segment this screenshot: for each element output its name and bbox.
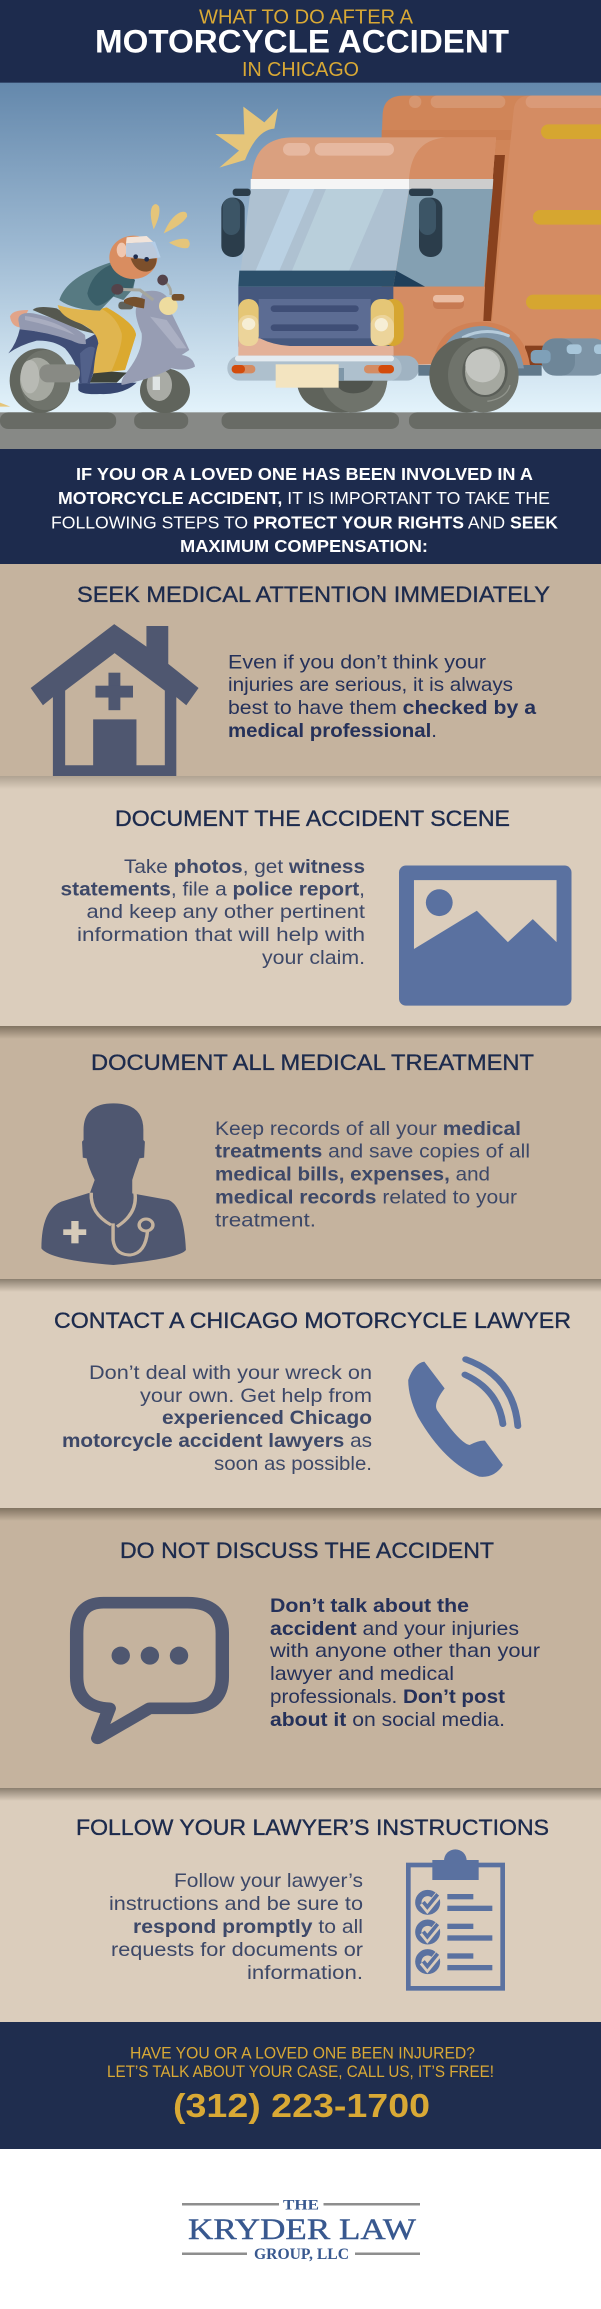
body text: Follow your lawyer’s bbox=[174, 1870, 363, 1892]
heading: seek medical attention: SEEK MEDICAL ATTENTION IMMEDIATELY bbox=[77, 582, 550, 607]
title line: what to do after a: WHAT TO DO AFTER A bbox=[199, 6, 413, 28]
heading: document the accident scene: DOCUMENT THE ACCIDENT SCENE bbox=[115, 806, 510, 831]
backdrop: sky and road bbox=[0, 83, 601, 449]
cta question: HAVE YOU OR A LOVED ONE BEEN INJURED? bbox=[130, 2044, 475, 2062]
panel: seek medical attention bbox=[0, 564, 601, 778]
body text: Don’t deal with your wreck on bbox=[89, 1362, 372, 1384]
intro text: MAXIMUM COMPENSATION: bbox=[180, 536, 428, 556]
panel: do not discuss the accident bbox=[0, 1508, 601, 1788]
title line: in chicago: IN CHICAGO bbox=[242, 58, 359, 81]
body text bbox=[60, 856, 366, 969]
hero illustration: motorcycle and truck bbox=[0, 83, 601, 449]
title line: motorcycle accident: MOTORCYCLE ACCIDENT bbox=[95, 24, 509, 60]
body text: your claim. bbox=[262, 947, 365, 969]
body text: best to have them checked by a bbox=[228, 697, 536, 719]
truck cargo box bbox=[382, 96, 601, 357]
body text: and keep any other pertinent bbox=[86, 901, 366, 923]
truck bumper bbox=[227, 356, 419, 388]
scooter body bbox=[8, 275, 195, 413]
panel: contact a chicago motorcycle lawyer bbox=[0, 1279, 601, 1508]
intro text: FOLLOWING STEPS TO PROTECT YOUR RIGHTS AND SEEK bbox=[51, 512, 558, 532]
body text: with anyone other than your bbox=[269, 1640, 541, 1662]
heading: do not discuss the accident: DO NOT DISCUSS THE ACCIDENT bbox=[120, 1538, 494, 1563]
truck bbox=[215, 96, 601, 412]
scooter and rider bbox=[8, 236, 195, 413]
panel: follow your lawyer's instructions bbox=[0, 1788, 601, 2022]
body text: experienced Chicago bbox=[162, 1407, 372, 1429]
intro text: IF YOU OR A LOVED ONE HAS BEEN INVOLVED IN A bbox=[76, 464, 533, 484]
body text: treatments and save copies of all bbox=[215, 1141, 530, 1163]
body text bbox=[269, 1595, 541, 1731]
impact burst bbox=[215, 107, 278, 168]
icon: photo bbox=[399, 866, 572, 1006]
header band bbox=[0, 0, 601, 83]
body text bbox=[228, 652, 536, 742]
truck rear wheel and exhaust bbox=[418, 322, 601, 412]
truck headlights bbox=[238, 299, 404, 346]
body text: about it on social media. bbox=[270, 1709, 505, 1731]
icon: medical house bbox=[31, 624, 199, 778]
intro band bbox=[0, 449, 601, 564]
body text: motorcycle accident lawyers as bbox=[62, 1430, 372, 1452]
logo: the kryder law group: GROUP, LLC bbox=[254, 2246, 349, 2263]
body text: accident and your injuries bbox=[270, 1618, 519, 1640]
body text: medical records related to your bbox=[215, 1186, 518, 1208]
heading: document all medical treatment: DOCUMENT ALL MEDICAL TREATMENT bbox=[91, 1050, 534, 1075]
logo: the kryder law group: THE bbox=[283, 2198, 319, 2214]
body text bbox=[109, 1870, 364, 1984]
body text: requests for documents or bbox=[111, 1939, 364, 1961]
heading: contact a chicago motorcycle lawyer: CONTACT A CHICAGO MOTORCYCLE LAWYER bbox=[54, 1308, 571, 1333]
body text: Don’t talk about the bbox=[270, 1595, 469, 1617]
body text: your own. Get help from bbox=[140, 1385, 372, 1407]
body text: professionals. Don’t post bbox=[270, 1686, 506, 1708]
logo: the kryder law group: KRYDER LAW bbox=[188, 2213, 417, 2246]
call to action band bbox=[0, 2022, 601, 2149]
icon: chat bubble bbox=[77, 1603, 222, 1738]
intro text: MOTORCYCLE ACCIDENT, IT IS IMPORTANT TO TAKE THE bbox=[58, 488, 550, 508]
body text bbox=[215, 1118, 530, 1232]
body text: information that will help with bbox=[77, 924, 365, 946]
phone number: (312) 223-1700 bbox=[173, 2087, 430, 2124]
body text: respond promptly to all bbox=[133, 1916, 363, 1938]
body text: Even if you don’t think your bbox=[228, 652, 487, 674]
truck cab bbox=[238, 137, 510, 365]
body text: statements , file a police report , bbox=[60, 878, 365, 900]
body text: lawyer and medical bbox=[270, 1663, 454, 1685]
rider bbox=[58, 236, 161, 383]
body text: treatment. bbox=[215, 1210, 316, 1232]
body text: injuries are serious, it is always bbox=[228, 674, 513, 696]
panel: document all medical treatment bbox=[0, 1026, 601, 1279]
body text: instructions and be sure to bbox=[109, 1893, 363, 1915]
body text: soon as possible. bbox=[214, 1453, 372, 1475]
icon: clipboard checklist bbox=[408, 1849, 503, 1988]
body text: medical professional . bbox=[228, 720, 437, 742]
truck front wheel bbox=[297, 380, 387, 412]
intro text bbox=[51, 464, 558, 556]
icon: phone bbox=[408, 1359, 518, 1477]
body text: Take photos, get witness bbox=[124, 856, 365, 878]
panel: document the accident scene bbox=[0, 776, 601, 1026]
heading: follow your lawyer's instructions: FOLLOW YOUR LAWYER’S INSTRUCTIONS bbox=[76, 1815, 549, 1840]
body text: Keep records of all your medical bbox=[215, 1118, 521, 1140]
cta invitation: LET’S TALK ABOUT YOUR CASE, CALL US, IT’S FREE! bbox=[107, 2063, 494, 2081]
icon: doctor bbox=[41, 1103, 186, 1265]
body text: information. bbox=[247, 1962, 363, 1984]
truck mirrors bbox=[221, 189, 442, 257]
body text: medical bills, expenses, and bbox=[215, 1164, 490, 1186]
body text bbox=[62, 1362, 372, 1475]
logo: the kryder law group bbox=[182, 2198, 420, 2263]
